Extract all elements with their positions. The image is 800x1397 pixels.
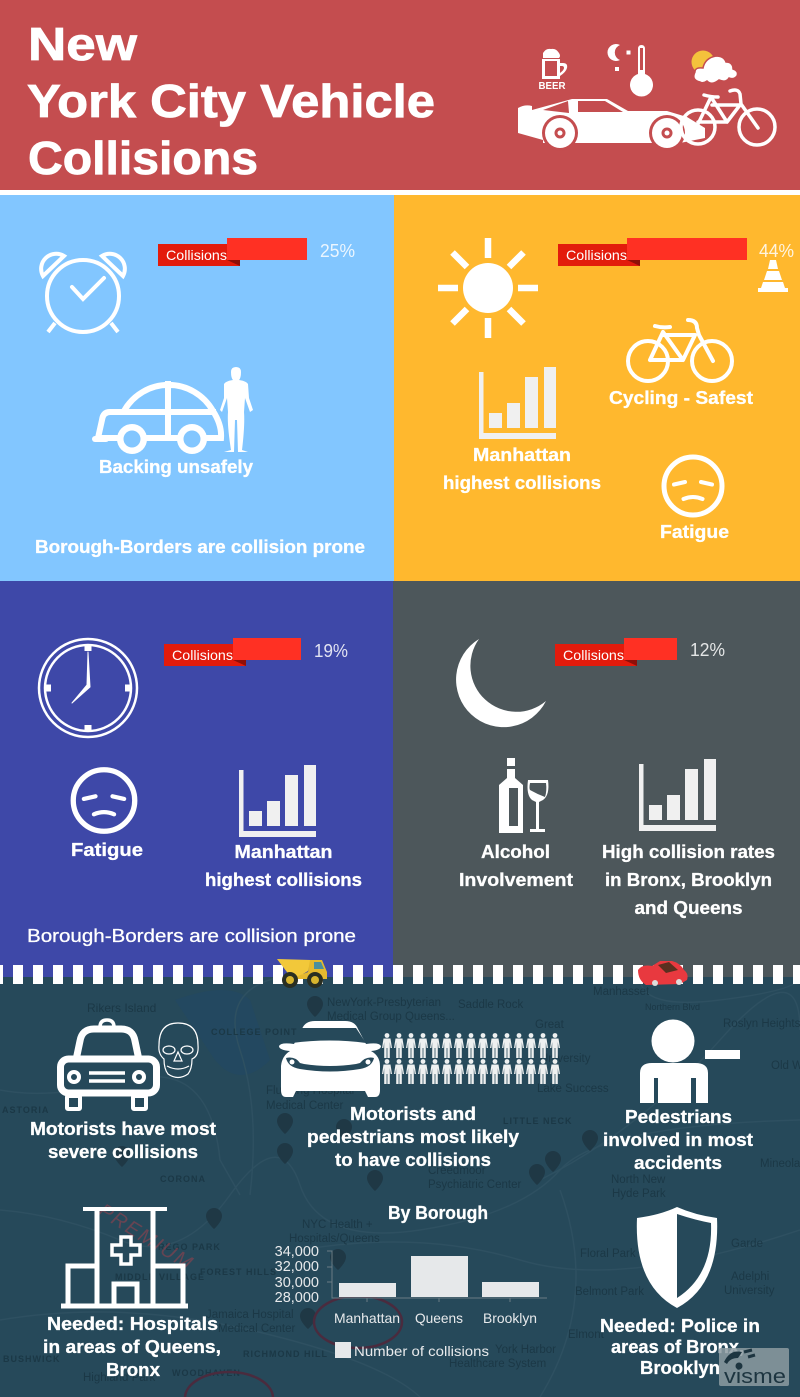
panel: police needed [600,1207,760,1378]
map labels: Medical Center [266,1100,344,1112]
y axis labels: 34,000 [275,1244,319,1260]
panel: motorists severe [30,1020,216,1162]
y axis labels: 30,000 [275,1275,319,1291]
map labels: NewYork-Presbyterian [327,997,441,1009]
panel: pedestrians [603,1020,753,1173]
map labels: Medical Group Queens... [327,1011,455,1023]
label: alcohol [459,842,573,890]
map labels: Great [535,1019,565,1031]
label: manhattan [443,445,601,493]
icon: sports car [518,99,705,151]
label: pedestrians: accidents [634,1153,722,1173]
map labels: LITTLE NECK [503,1116,572,1126]
label: hospitals: Needed: Hospitals [47,1314,218,1334]
icon: alarm clock [41,254,125,332]
panel: title banner [0,0,800,190]
ribbon: collisions 44%: Collisions [566,247,627,263]
map labels: Healthcare System [449,1358,546,1370]
panel: motorists and pedestrians [279,1021,560,1170]
icon: tired face [664,457,722,515]
title: New [28,18,137,70]
label: manhattan: Manhattan [234,842,332,862]
label: hospitals [43,1314,221,1380]
icon: crescent moon [456,639,546,727]
label: fatigue: Fatigue [660,522,729,542]
icon: crowd of people [382,1033,560,1084]
ribbon: collisions 25%: 25% [320,241,355,261]
map labels: Highland Park [83,1372,155,1384]
title: Collisions [28,132,258,184]
label: borough borders: Borough-Borders are collision prone [27,926,356,946]
map labels: REGO PARK [158,1242,221,1252]
map labels: CORONA [160,1174,206,1184]
ribbon: collisions 44% [558,238,794,266]
title: York City Vehicle [27,75,435,127]
label: high collision rates [602,842,775,918]
panel: hospitals needed [43,1209,221,1380]
label: motorists and pedestrians: pedestrians most likely [307,1127,519,1147]
panel: morning [0,195,394,581]
icon: sun and cloud [692,50,738,83]
map labels: Rikers Island [87,1001,156,1015]
icon: car and pedestrian [95,367,253,454]
map labels: BUSHWICK [3,1354,60,1364]
icon: shield [637,1207,717,1308]
panel: night [393,581,800,977]
icon: tired face [73,770,135,831]
panel: daytime [394,195,800,581]
map labels [2,986,800,1384]
ribbon: collisions 12%: 12% [690,640,725,660]
map labels: Garde [731,1238,763,1250]
label: motorists: Motorists have most [30,1119,216,1139]
icon: sun [438,238,538,338]
map labels: Lake Success [537,1083,609,1095]
panel: evening [0,581,393,977]
label: alcohol: Alcohol [481,842,550,862]
label: pedestrians: involved in most [603,1130,753,1150]
label: pedestrians [603,1107,753,1173]
visme badge: visme [724,1366,786,1388]
map labels: NYC Health + [302,1219,373,1231]
label: manhattan [205,842,362,890]
icon: moon and thermometer [608,44,653,96]
label: motorists [30,1119,216,1162]
label: pedestrians: Pedestrians [625,1107,732,1127]
label: borough borders: Borough-Borders are collision prone [35,537,365,557]
map labels: Roslyn Heights [723,1018,800,1030]
label: motorists: severe collisions [48,1142,198,1162]
y axis labels [275,1244,319,1306]
map labels: Saddle Rock [458,999,523,1011]
visme badge [719,1348,789,1388]
ribbon: collisions 44%: 44% [759,241,794,261]
label: hospitals: Bronx [106,1360,160,1380]
ribbon: collisions 19% [164,638,348,666]
legend: Number of collisions [354,1343,489,1359]
map labels: Adelphi [731,1271,769,1283]
label: manhattan: highest collisions [443,473,601,493]
map labels: RICHMOND HILL [243,1349,328,1359]
label: police: Brooklyn [640,1358,720,1378]
ribbon: collisions 25% [158,238,355,266]
label: manhattan: Manhattan [473,445,571,465]
map labels: Hyde Park [612,1188,666,1200]
label: motorists and pedestrians: Motorists and [350,1104,476,1124]
map labels: FOREST HILLS [200,1267,277,1277]
icon: bicycle [681,90,775,145]
icon: beer mug [538,49,567,92]
icon: traffic cone [758,260,788,292]
ribbon: collisions 12% [555,638,725,666]
map labels: MIDDLE VILLAGE [115,1272,205,1282]
ribbon: collisions 19%: Collisions [172,647,233,663]
icon: beer mug: BEER [538,81,566,92]
chart: by borough [275,1203,547,1359]
map labels: Medical Center [218,1323,296,1335]
divider strip [0,190,800,195]
icon: taxi [60,1020,156,1109]
label: high collision rates: and Queens [634,898,742,918]
label: cycling: Cycling - Safest [609,388,753,408]
road dashes [0,965,800,984]
label: manhattan: highest collisions [205,870,362,890]
y axis labels: 28,000 [275,1290,319,1306]
map labels: North New [611,1174,666,1186]
icon: bicycle [628,320,732,381]
map circles [185,1296,402,1397]
icon: hospital [61,1209,188,1306]
title [27,18,435,184]
label: motorists and pedestrians: to have collisions [335,1150,491,1170]
icon: bar chart [479,367,556,439]
map labels: Jamaica Hospital [206,1309,294,1321]
ribbon: collisions 25%: Collisions [166,247,227,263]
icon: wine bottle and glass [499,758,548,833]
x labels: Brooklyn [483,1310,537,1326]
label: backing unsafely: Backing unsafely [99,457,253,477]
icon: person with minus [640,1020,740,1103]
map labels: Belmont Park [575,1286,644,1298]
panel: map background [0,977,800,1397]
map labels: COLLEGE POINT [211,1027,298,1037]
ribbon: collisions 12%: Collisions [563,647,624,663]
map labels: Manhasset [593,986,650,998]
label: motorists and pedestrians [307,1104,519,1170]
icon: bar chart [239,765,316,837]
icon: wall clock [39,639,137,737]
map pins [114,996,598,1329]
map labels: Elmont [568,1329,605,1341]
map labels: Hospitals/Queens [289,1233,380,1245]
map labels: Creedmoor [428,1165,486,1177]
map labels: Mineola [760,1158,800,1170]
map labels: ASTORIA [2,1105,49,1115]
label: high collision rates: High collision rates [602,842,775,862]
icon: car front [279,1021,381,1097]
label: high collision rates: in Bronx, Brooklyn [605,870,772,890]
label: fatigue: Fatigue [71,840,143,860]
bars [339,1256,539,1297]
map labels: Floral Park [580,1248,636,1260]
y axis labels: 32,000 [275,1259,319,1275]
map labels: Psychiatric Center [428,1179,521,1191]
watermark: PREMIUM [94,1200,196,1275]
label: police [600,1316,760,1378]
x labels [334,1310,537,1326]
map labels: University [724,1285,775,1297]
x labels: Queens [415,1310,463,1326]
map labels: University [540,1053,591,1065]
chart title: By Borough [388,1203,488,1223]
icon: red car [638,961,688,986]
map labels: WOODHAVEN [172,1368,241,1378]
label: police: areas of Bronx, [611,1337,744,1357]
icon: bar chart [639,759,716,831]
map labels: Northern Blvd [645,1002,700,1012]
map labels: Flushing Hospital [266,1085,354,1097]
label: police: Needed: Police in [600,1316,760,1336]
map labels: York Harbor [495,1344,556,1356]
label: hospitals: in areas of Queens, [43,1337,221,1357]
icon: dump truck [277,959,327,988]
x labels: Manhattan [334,1310,400,1326]
ribbon: collisions 19%: 19% [314,641,348,661]
label: alcohol: Involvement [459,870,573,890]
icon: skull [159,1023,198,1078]
